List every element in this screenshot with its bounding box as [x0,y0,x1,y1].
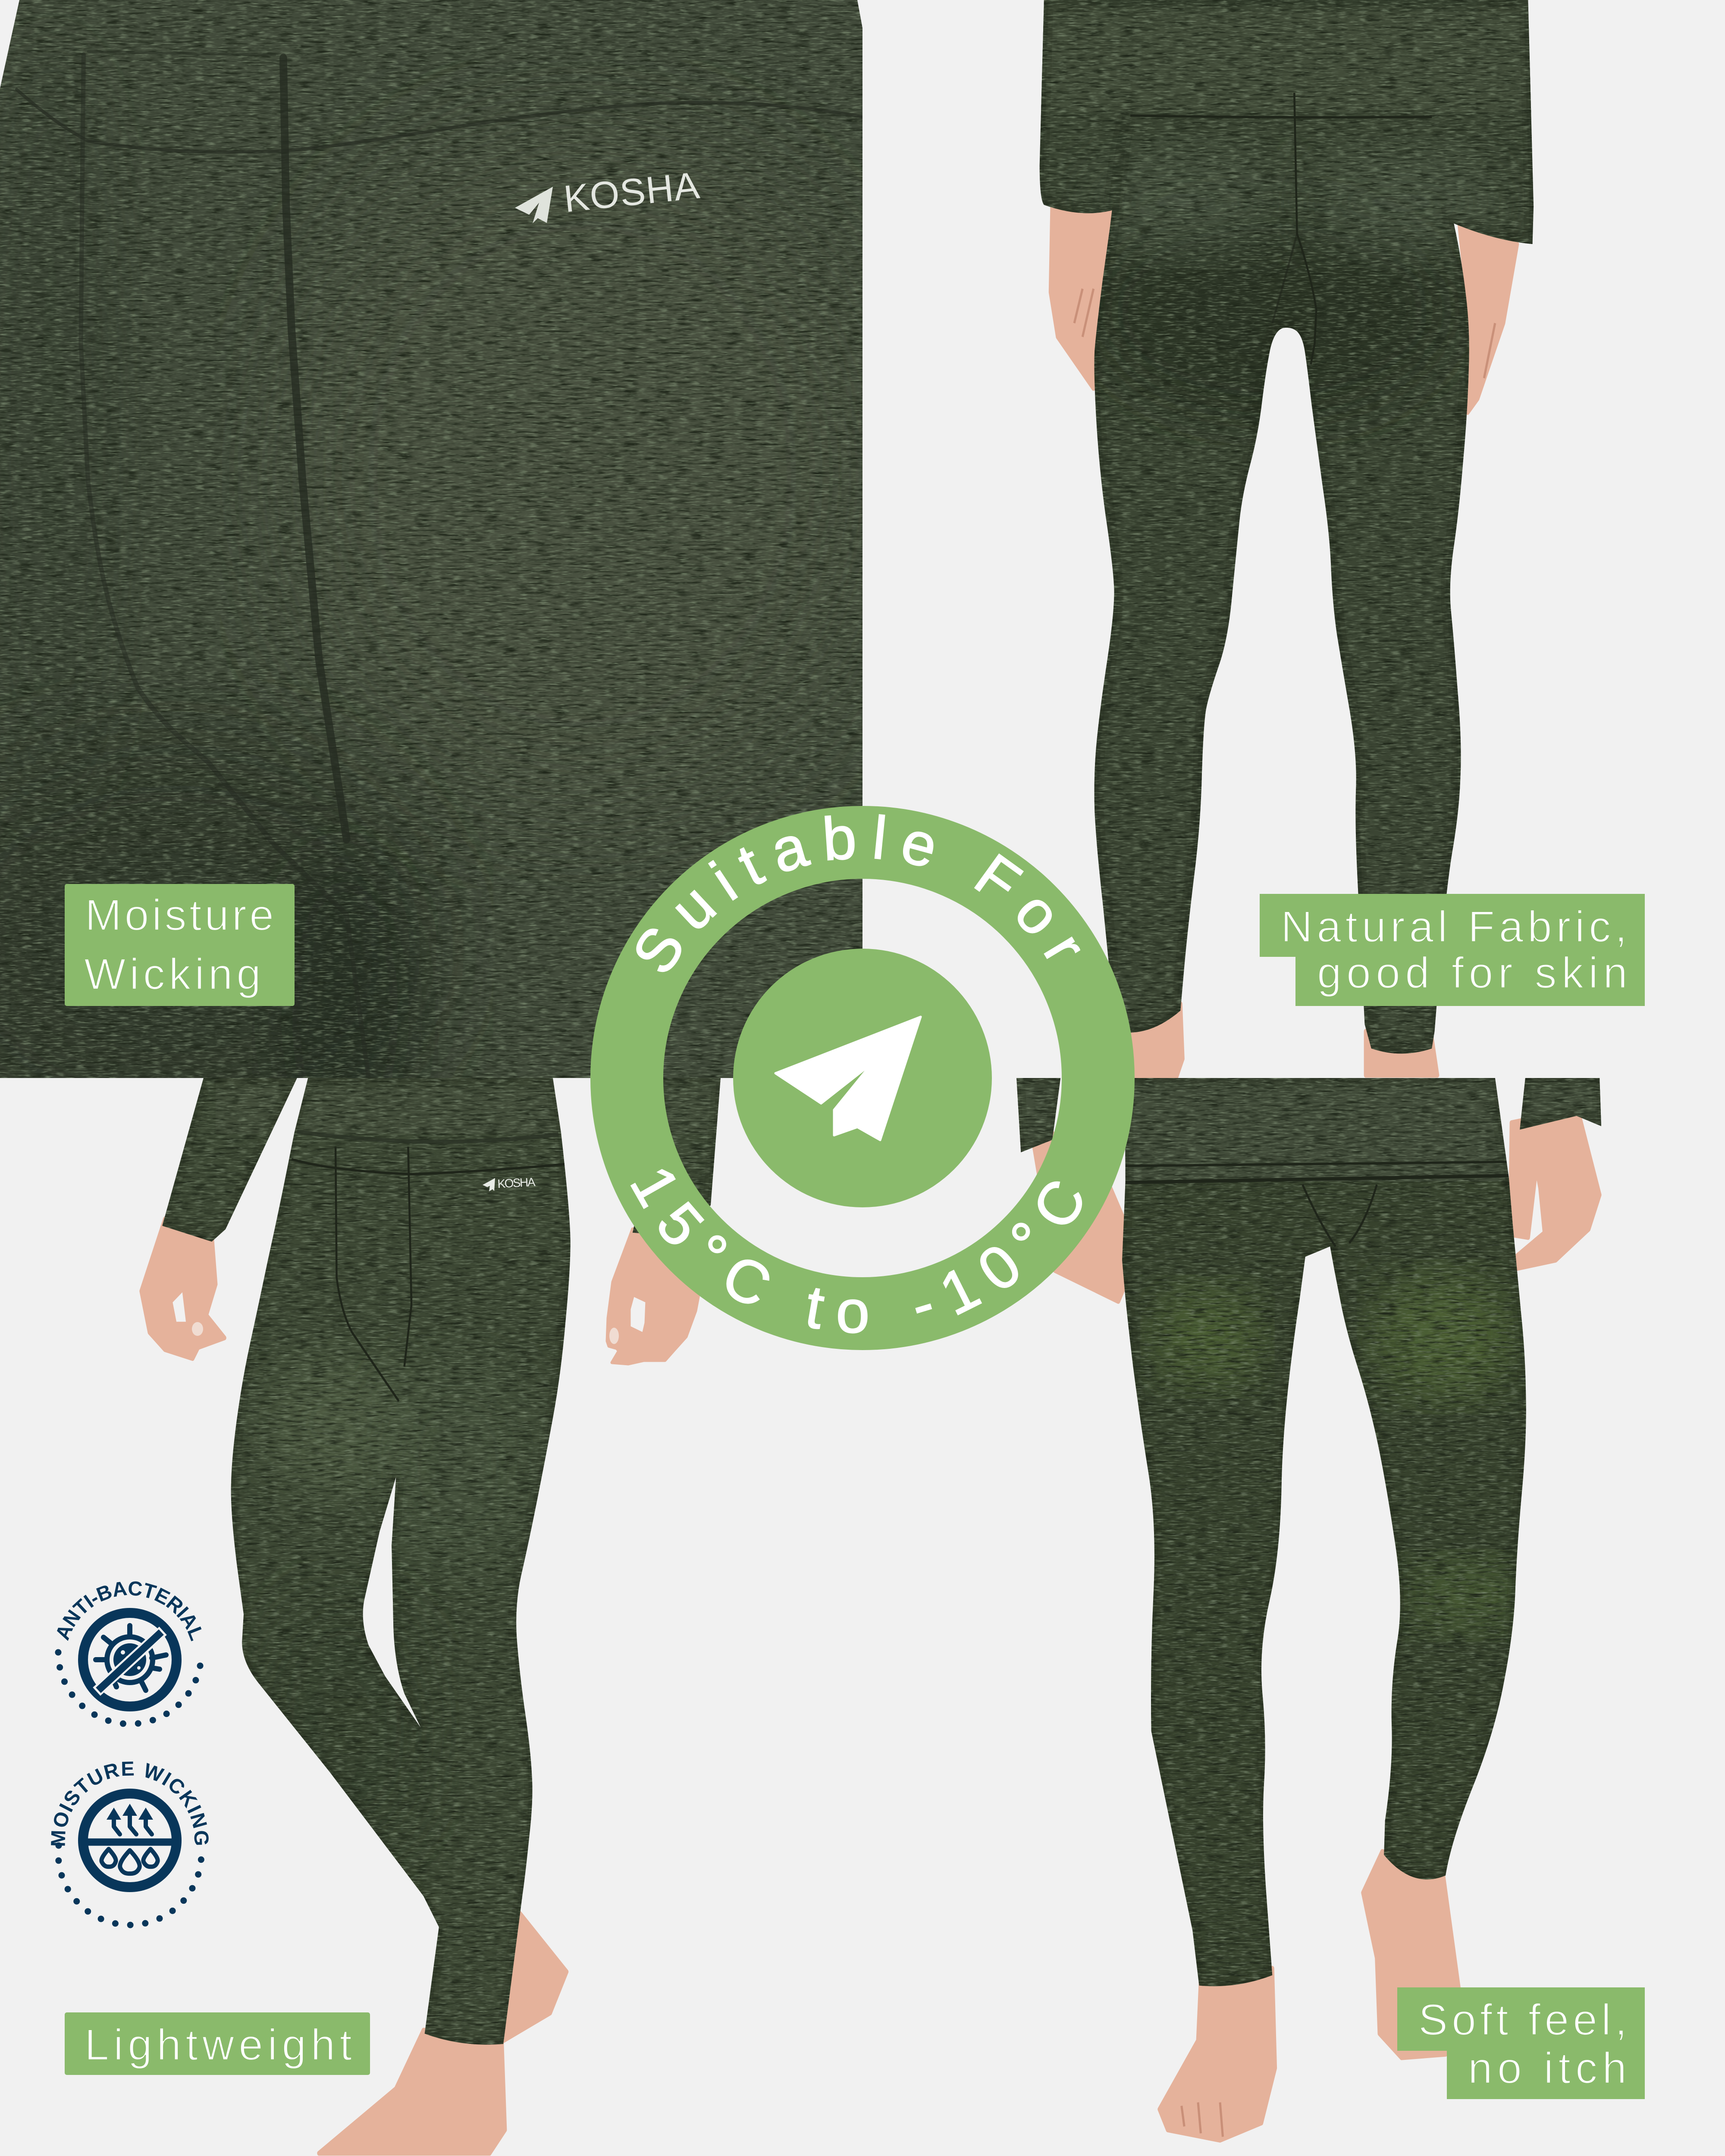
anti-bacterial curved label: ANTI-BACTERIAL [50,1576,209,1643]
panel: model front view standing [992,1078,1639,2156]
walking view thumbnail nails [192,1322,619,1344]
icon: paper plane [775,1017,921,1140]
panel: fabric close-up photo [0,0,862,1078]
green ring [627,843,1098,1313]
label: Natural Fabric, good for skin [1260,894,1645,1006]
panel: model front view walking [129,1078,776,2156]
standing view garment [992,1078,1639,2156]
label: Soft feel, no itch: no itch [1468,2043,1627,2093]
label: Moisture Wicking: Wicking [84,950,261,999]
walking view hands and feet [141,1219,699,2153]
garment corner cut-outs [0,0,862,88]
anti-bacterial dotted arc [58,1652,201,1724]
center green disc [733,949,992,1207]
fabric seams [16,52,862,1078]
walking view right hand [607,1229,699,1364]
logo plane icon [515,187,553,223]
rear view garment [992,0,1639,1078]
badge: anti-bacterial [50,1576,209,1724]
moisture arrows and drops icon [83,1794,177,1887]
standing view hands and feet [1033,1109,1600,2140]
logo wordmark: KOSHA [562,163,702,220]
rear view finger creases [1074,289,1495,378]
walking view seams [292,1131,567,1401]
ring text: temperature range: 15°C to -10°C [618,1154,1108,1345]
panel: model rear view [992,0,1639,1078]
label: Lightweight: Lightweight [85,2020,352,2069]
small logo plane icon [483,1178,495,1191]
label: Natural Fabric, good for skin: Natural Fabric, [1281,902,1627,951]
standing view seams [1124,1162,1509,1247]
KOSHA logo on fabric [515,163,702,223]
rear view seams [1130,93,1432,364]
label: Moisture Wicking [65,884,295,1006]
central temperature badge [618,802,1108,1345]
walking view garment [129,1078,776,2156]
label: Soft feel, no itch [1397,1987,1645,2099]
badge: moisture wicking [46,1757,213,1925]
moisture dotted arc [58,1846,201,1925]
small logo wordmark: KOSHA [497,1175,536,1191]
rear view hands and feet [1051,203,1517,1078]
moisture curved label: MOISTURE WICKING [46,1757,213,1847]
label: Natural Fabric, good for skin: good for skin [1317,948,1628,997]
label: Soft feel, no itch: Soft feel, [1418,1995,1627,2044]
label: Moisture Wicking: Moisture [85,890,274,940]
standing view toes [1182,2103,1223,2137]
anti-bacterial no-virus icon [83,1613,177,1707]
small KOSHA logo [483,1175,536,1191]
label: Lightweight [65,2012,370,2075]
ring text: Suitable For: Suitable For [619,802,1107,986]
